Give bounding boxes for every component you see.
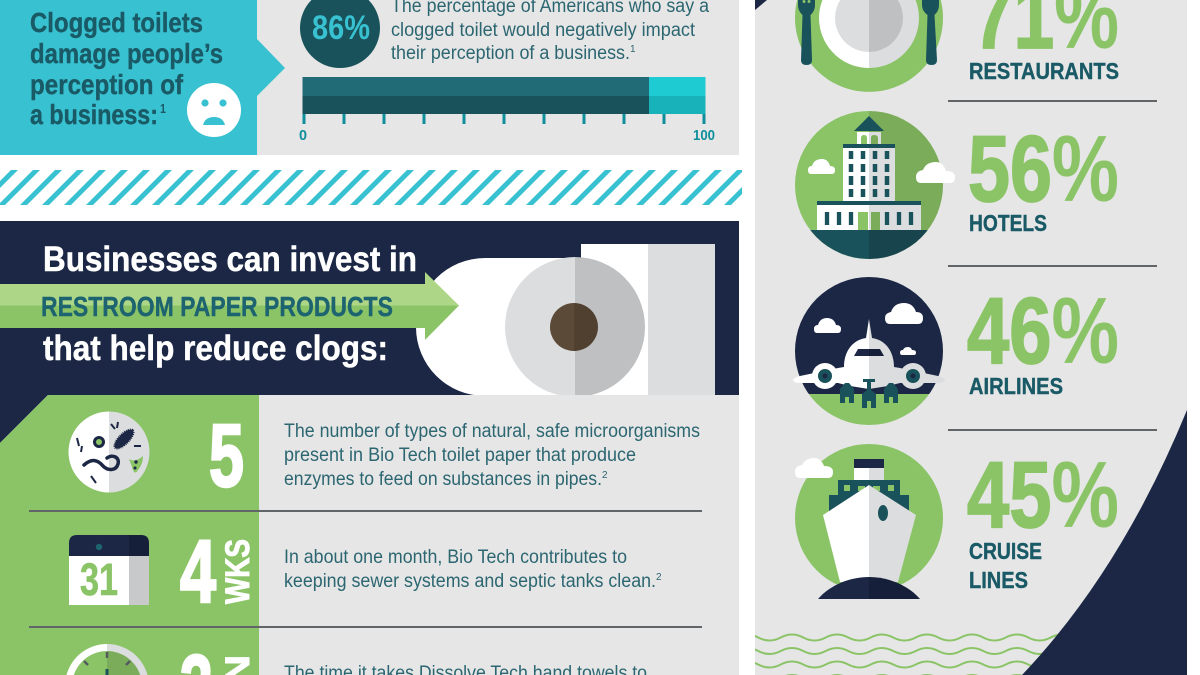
icon: airplane xyxy=(793,277,945,426)
waves xyxy=(755,634,1058,675)
text: percentage description: 1 xyxy=(630,44,636,55)
illustration: toilet paper roll xyxy=(416,244,715,397)
stat: 46% airlines: AIRLINES xyxy=(969,373,1063,399)
icon: hotel xyxy=(795,111,955,260)
number: 5: 5 xyxy=(209,405,244,505)
icon: restaurant plate xyxy=(795,0,943,92)
text: one month: 2 xyxy=(656,572,662,583)
icon: calendar: 31 xyxy=(80,554,118,605)
text: one month: In about one month, Bio Tech contributes to xyxy=(284,547,627,568)
number: 4 weeks: 4 xyxy=(180,521,216,621)
banner label: restroom paper products: RESTROOM PAPER PRODUCTS xyxy=(41,291,393,322)
heading line: that help reduce clogs: that help reduce clogs: xyxy=(43,329,388,368)
panel: industries xyxy=(736,0,1187,675)
text: one month: keeping sewer systems and septic tanks clean. xyxy=(284,571,656,592)
heading: clogged toilets: a business: xyxy=(30,99,158,130)
bar chart: 86 of 100 xyxy=(299,77,715,144)
icon: calendar xyxy=(69,535,149,605)
text: percentage description: clogged toilet would negatively impact xyxy=(391,20,696,41)
panel: paper products banner xyxy=(0,221,739,443)
text: microorganisms xyxy=(284,421,700,490)
icon: clock xyxy=(66,644,148,675)
text: microorganisms: present in Bio Tech toilet paper that produce xyxy=(284,445,636,466)
text: one month xyxy=(284,547,662,592)
arrow: green banner xyxy=(0,272,459,340)
number: 3 minutes xyxy=(180,636,257,675)
stat: 56% hotels: HOTELS xyxy=(969,210,1047,236)
panel: clogged toilets perception callout xyxy=(0,0,285,155)
heading: clogged toilets: Clogged toilets xyxy=(30,7,203,38)
stat: 46% airlines: 46% xyxy=(967,278,1119,383)
text: percentage description xyxy=(391,0,709,64)
stat: 45% cruise lines: LINES xyxy=(969,567,1028,593)
text: microorganisms: 2 xyxy=(602,470,608,481)
heading: clogged toilets xyxy=(30,7,223,130)
panel: 86 percent statistic xyxy=(257,0,739,155)
heading: clogged toilets: 1 xyxy=(160,101,166,116)
number: 4 weeks xyxy=(180,521,257,621)
icon: cruise ship xyxy=(795,444,943,599)
heading: clogged toilets: perception of xyxy=(30,69,184,100)
text: microorganisms: The number of types of natural, safe microorganisms xyxy=(284,421,700,442)
stat: 45% cruise lines: 45% xyxy=(967,442,1119,547)
panel: product facts xyxy=(0,395,739,675)
number: 4 weeks: WKS xyxy=(219,539,257,604)
icon: microorganisms xyxy=(68,412,150,492)
bar chart: 86 of 100: 100 xyxy=(693,127,715,144)
bar chart: 86 of 100: 0 xyxy=(299,127,307,144)
stat: 45% cruise lines xyxy=(967,442,1119,593)
icon: sad face xyxy=(187,83,241,137)
stat: 71% restaurants: RESTAURANTS xyxy=(969,58,1119,84)
heading: clogged toilets: damage people’s xyxy=(30,38,223,69)
stat badge: 86% xyxy=(300,0,380,68)
text: percentage description: their perception of a business. xyxy=(391,43,630,64)
stat: 45% cruise lines: CRUISE xyxy=(969,538,1042,564)
stat: 56% hotels: 56% xyxy=(968,116,1119,221)
heading line: businesses can invest in: Businesses can invest in xyxy=(43,240,417,279)
text: microorganisms: enzymes to feed on substances in pipes. xyxy=(284,469,602,490)
stat badge: 86%: 86% xyxy=(312,9,370,47)
